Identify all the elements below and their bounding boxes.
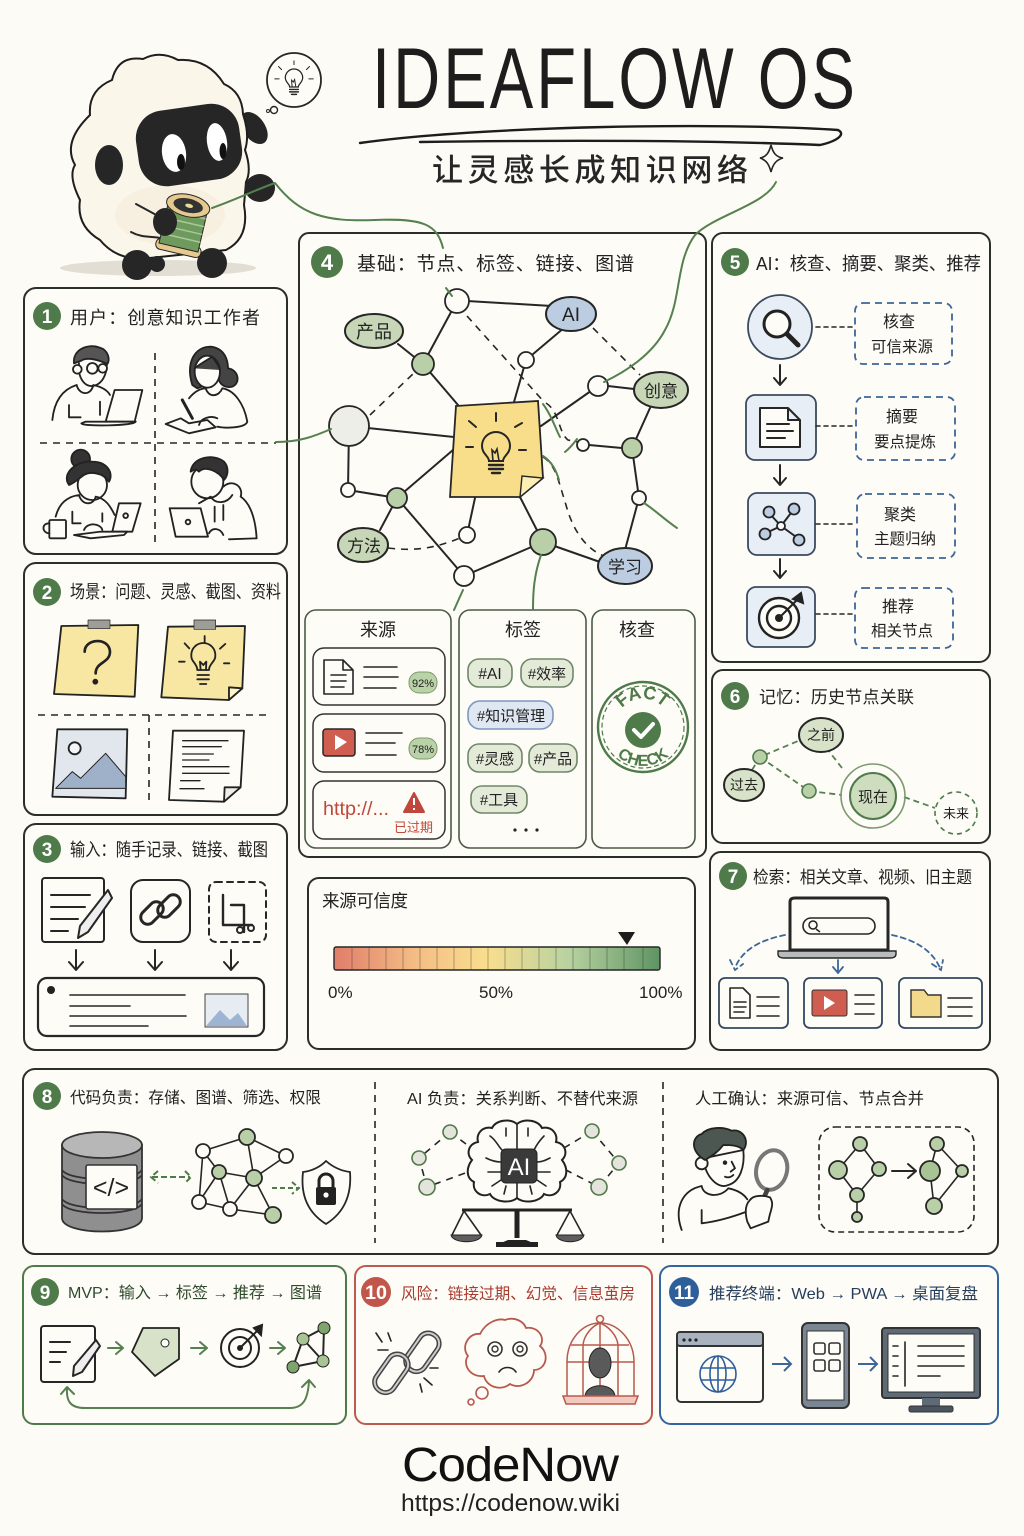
- credibility gradient bar: [334, 947, 660, 970]
- heading 5: AI：核查、摘要、聚类、推荐: [756, 254, 981, 274]
- sticky note: bulb: [161, 620, 245, 700]
- document: [169, 731, 244, 802]
- timeline graph: 未来: [943, 806, 969, 821]
- link icon: [131, 880, 190, 942]
- heading 11: 推荐终端：Web → PWA → 桌面复盘: [709, 1284, 978, 1303]
- icon: browser: [677, 1332, 763, 1402]
- box: summary: [856, 397, 955, 460]
- card: tags: [459, 610, 586, 848]
- search arrows: [730, 935, 943, 973]
- source row: video 78%: 78%: [412, 744, 434, 756]
- node 学习: 学习: [608, 558, 642, 577]
- heading 4: 基础：节点、标签、链接、图谱: [357, 253, 634, 275]
- panel 1: users: [24, 288, 287, 554]
- brain with AI chip: AI: [508, 1154, 530, 1181]
- box: cluster: [857, 494, 955, 558]
- node AI: [546, 297, 596, 331]
- icon: tag: [132, 1328, 179, 1376]
- panel 4: foundation graph: [298, 232, 707, 858]
- title: IDEAFLOW OS: [372, 31, 858, 127]
- heading 10: 风险：链接过期、幻觉、信息茧房: [401, 1285, 635, 1303]
- box: cluster: 主题归纳: [874, 530, 936, 548]
- box: recommend: 相关节点: [871, 622, 933, 640]
- badge 5: [721, 248, 749, 276]
- balance scale: [451, 1210, 584, 1247]
- card: fact check: 核查: [619, 620, 655, 640]
- box: verify: 核查: [883, 313, 915, 331]
- timeline graph: 过去: [730, 777, 758, 793]
- card: tags: #产品: [534, 751, 572, 768]
- graph nodes: [329, 289, 646, 586]
- timeline graph: 现在: [858, 789, 888, 806]
- node 学习: [598, 548, 652, 584]
- node 方法: 方法: [347, 537, 381, 556]
- mascot: sheep holding thread spool: [60, 55, 275, 280]
- source row: expired link: [313, 781, 445, 839]
- thought bubble with light bulb: [266, 53, 321, 114]
- card: tags: #灵感: [476, 751, 514, 768]
- arrows: [108, 1342, 285, 1354]
- node 产品: 产品: [356, 322, 392, 342]
- loop arrow: [61, 1380, 315, 1408]
- double arrow: [151, 1171, 191, 1183]
- panel 9: MVP: [23, 1266, 346, 1424]
- icon: graph: [287, 1322, 330, 1373]
- sparkle icon: [760, 145, 783, 172]
- badge 11: [669, 1277, 699, 1307]
- fact check stamp: CHECK: [619, 747, 669, 766]
- box: recommend: [855, 588, 953, 648]
- panel 10: risks: [355, 1266, 652, 1424]
- card: tags: #知识管理: [477, 708, 545, 725]
- arrow: [858, 1357, 877, 1371]
- icon: desktop: [882, 1328, 980, 1412]
- scale labels: 0%: [328, 983, 353, 1002]
- badge 9: [31, 1278, 59, 1306]
- badge 4: 4: [321, 250, 334, 275]
- badge 6: [721, 682, 749, 710]
- card: tags: 标签: [505, 620, 541, 640]
- heading 3: 输入：随手记录、链接、截图: [70, 840, 268, 860]
- icon: note: [41, 1326, 100, 1382]
- heading 9: MVP：输入 → 标签 → 推荐 → 图谱: [68, 1284, 322, 1302]
- result: article: [719, 978, 788, 1028]
- panel 6: memory: [712, 670, 990, 843]
- sticky note with bulb: [450, 401, 543, 497]
- card: sources: [305, 610, 451, 848]
- scale labels: 50%: [479, 983, 513, 1002]
- icon: target: [747, 587, 815, 647]
- scale labels: 100%: [639, 983, 682, 1002]
- source row: video 78%: [313, 714, 445, 772]
- icon: search: [748, 295, 812, 359]
- heading AI: AI 负责：关系判断、不替代来源: [407, 1090, 638, 1108]
- panel: source credibility: [308, 878, 695, 1049]
- crop icon: [209, 882, 266, 942]
- panel 7: search: [710, 852, 990, 1050]
- side networks right: [564, 1124, 626, 1195]
- arrow: [772, 1357, 791, 1371]
- image placeholder: [52, 729, 127, 798]
- badge 10: 10: [365, 1283, 387, 1304]
- box: recommend: 推荐: [882, 598, 914, 616]
- badge 9: 9: [40, 1283, 50, 1304]
- box: verify: [855, 303, 952, 364]
- panel 3: input: [24, 824, 287, 1050]
- badge 2: 2: [42, 583, 52, 604]
- node 产品: [345, 314, 403, 348]
- heading 7: 检索：相关文章、视频、旧主题: [753, 868, 972, 887]
- badge 7: [719, 862, 747, 890]
- badge 7: 7: [728, 867, 738, 888]
- source row: document 92%: [313, 648, 445, 705]
- badge 3: [33, 835, 61, 863]
- source row: expired link: 已过期: [394, 820, 433, 835]
- badge 3: 3: [42, 840, 52, 861]
- title underline: [360, 126, 841, 145]
- heading code: 代码负责：存储、图谱、筛选、权限: [70, 1088, 321, 1107]
- badge 1: [33, 302, 61, 330]
- scale labels: [328, 983, 682, 1002]
- icon: cluster: [748, 493, 815, 555]
- card: fact check: [591, 609, 696, 849]
- result: folder: [899, 978, 982, 1028]
- badge 6: 6: [730, 687, 740, 708]
- box: summary: 摘要: [886, 408, 918, 426]
- database with code card: [62, 1132, 142, 1232]
- card: tags: #AI: [478, 666, 502, 683]
- green thread: [212, 182, 776, 610]
- note with pencil icon: [42, 878, 112, 942]
- laptop with search bar: [778, 898, 896, 958]
- box: verify: 可信来源: [871, 338, 933, 356]
- footer: url: https://codenow.wiki: [401, 1490, 620, 1517]
- icon: target: [221, 1325, 262, 1367]
- user with glasses and laptop: [52, 346, 142, 425]
- merge diagram: [819, 1127, 974, 1232]
- result: video: [804, 978, 882, 1028]
- database with code card: </>: [93, 1174, 129, 1202]
- heading 2: 场景：问题、灵感、截图、资料: [70, 582, 281, 602]
- badge 8: [33, 1082, 61, 1110]
- node AI: AI: [562, 305, 580, 326]
- footer: brand: CodeNow: [402, 1439, 619, 1492]
- badge 11: 11: [674, 1283, 694, 1304]
- arrows: [69, 950, 238, 970]
- box: cluster: 聚类: [884, 506, 916, 524]
- subtitle: 让灵感长成知识网络: [432, 153, 748, 188]
- badge 10: [361, 1277, 391, 1307]
- brain with AI chip: [468, 1121, 566, 1201]
- icon: broken chain: [371, 1329, 443, 1397]
- source row: expired link: http://...: [323, 799, 389, 820]
- timeline graph: 之前: [807, 727, 835, 743]
- sticky note: question: [54, 620, 138, 697]
- fact check stamp: [596, 680, 690, 774]
- heading human: 人工确认：来源可信、节点合并: [695, 1090, 924, 1108]
- badge 4: [311, 246, 343, 278]
- user in hoodie with laptop: [170, 457, 257, 539]
- knowledge graph: [329, 289, 688, 586]
- card: tags: #效率: [528, 666, 566, 683]
- person with magnifier: [679, 1128, 791, 1230]
- card: tags: #工具: [480, 792, 518, 809]
- user with curly hair and mug: [43, 450, 141, 538]
- heading 6: 记忆：历史节点关联: [759, 688, 914, 707]
- timeline graph: [724, 718, 977, 834]
- panel 11: terminals: [660, 1266, 998, 1424]
- panel 8: division of labour: [23, 1069, 998, 1254]
- box: summary: 要点提炼: [874, 433, 936, 451]
- badge 8: 8: [42, 1087, 52, 1108]
- heading 1: 用户：创意知识工作者: [70, 308, 260, 328]
- arrow to shield: [272, 1182, 299, 1194]
- icon: bird cage with person: [563, 1316, 638, 1404]
- card: sources: 来源: [360, 620, 396, 640]
- input box: [38, 978, 264, 1036]
- network icon: [192, 1129, 293, 1223]
- icon: document summary: [746, 395, 816, 460]
- badge 2: [33, 578, 61, 606]
- panel: source credibility: 来源可信度: [322, 891, 408, 911]
- badge 1: 1: [42, 307, 53, 328]
- user writing in notebook: [166, 347, 247, 433]
- shield with lock: [302, 1161, 350, 1224]
- icon: confused cloud: [465, 1319, 546, 1405]
- panel 2: scenes: [24, 563, 287, 815]
- marker: [618, 932, 635, 945]
- side networks left: [412, 1125, 474, 1195]
- badge 5: 5: [730, 253, 741, 274]
- icon: phone: [802, 1323, 849, 1408]
- node 创意: [634, 372, 688, 408]
- node 创意: 创意: [644, 382, 678, 401]
- node 方法: [338, 528, 388, 562]
- panel 5: AI: [712, 233, 990, 662]
- connectors and arrows: [774, 327, 856, 614]
- fact check stamp: FACT: [615, 686, 672, 708]
- source row: document 92%: 92%: [412, 678, 434, 690]
